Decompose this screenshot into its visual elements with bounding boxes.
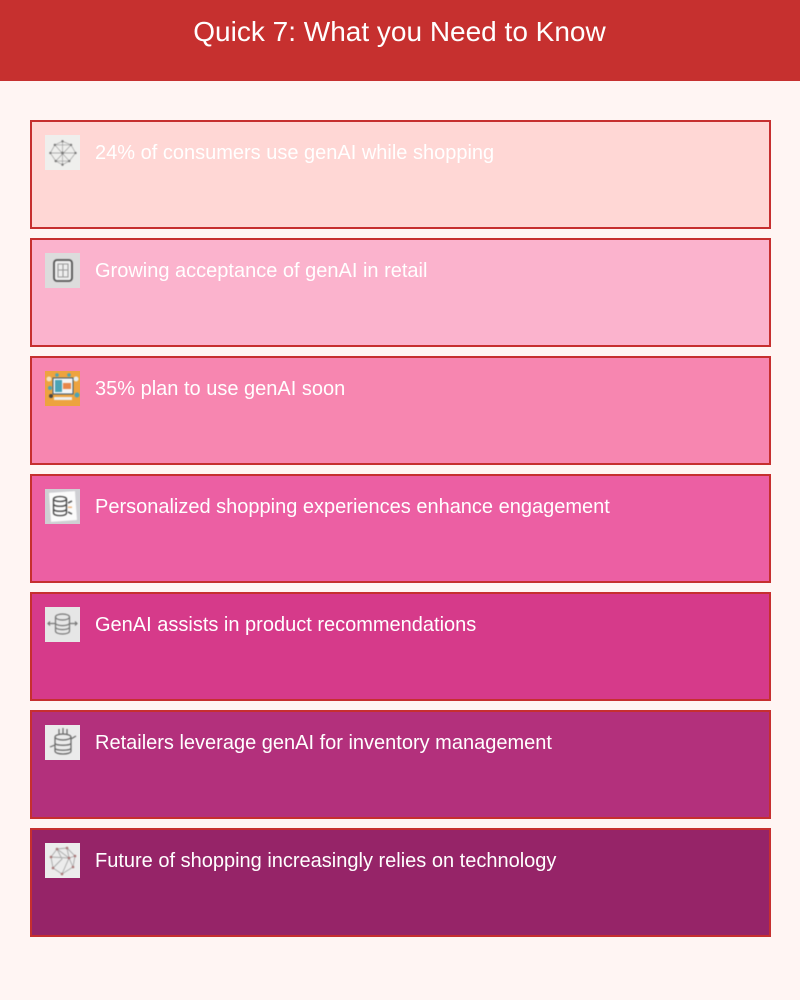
panel: fact 6	[30, 710, 771, 819]
icon: globe network	[45, 843, 80, 878]
text: 35% plan to use genAI soon	[95, 378, 345, 400]
panel: fact 2	[30, 238, 771, 347]
text: Growing acceptance of genAI in retail	[95, 260, 427, 282]
panel: fact 4	[30, 474, 771, 583]
panel: fact 1	[30, 120, 771, 229]
text: Future of shopping increasingly relies on technology	[95, 850, 556, 872]
icon: computer	[45, 371, 80, 406]
title: Quick 7: What you Need to Know	[193, 16, 606, 47]
text: 24% of consumers use genAI while shopping	[95, 142, 494, 164]
icon: database arrows	[45, 607, 80, 642]
panel: fact 5	[30, 592, 771, 701]
icon: database note	[45, 489, 80, 524]
text: GenAI assists in product recommendations	[95, 614, 476, 636]
header banner	[0, 0, 800, 81]
text: Retailers leverage genAI for inventory management	[95, 732, 552, 754]
panel: fact 7	[30, 828, 771, 937]
icon: chip	[45, 253, 80, 288]
icon: network	[45, 135, 80, 170]
panel: fact 3	[30, 356, 771, 465]
text: Personalized shopping experiences enhance engagement	[95, 496, 610, 518]
icon: database stack	[45, 725, 80, 760]
